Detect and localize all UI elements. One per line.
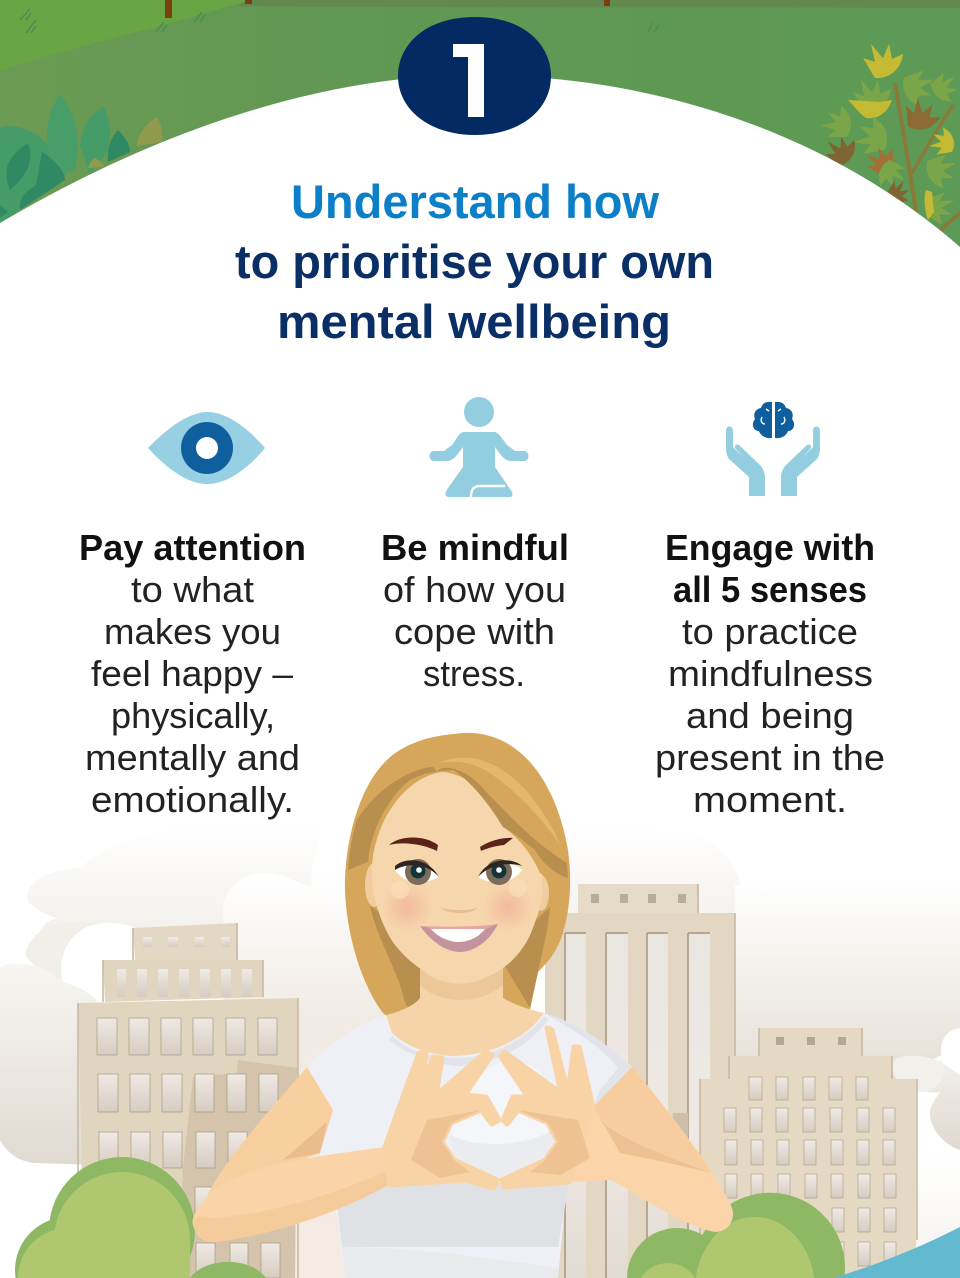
ears: [365, 863, 383, 907]
hair dark band left: [348, 767, 437, 870]
column: engage with all 5 senses: moment.: [693, 779, 847, 820]
column: engage with all 5 senses: present in the: [655, 737, 885, 778]
column: pay attention: to what: [131, 569, 254, 610]
autumn tree top-right: [817, 44, 960, 230]
column: be mindful: of how you: [383, 569, 566, 610]
column: pay attention: makes you: [104, 611, 281, 652]
title: Understand how: [291, 175, 659, 228]
smile: [420, 924, 498, 952]
icon: meditating person: [430, 397, 528, 497]
left eye: [395, 863, 439, 882]
woman making a heart with her hands: [193, 733, 733, 1278]
right eye: [478, 863, 522, 882]
icon: eye: [148, 412, 265, 484]
brain: [753, 402, 794, 438]
column: pay attention: physically,: [111, 695, 275, 736]
building on the left: [78, 923, 298, 1278]
cheeks: [381, 881, 433, 933]
water corner bottom right: [833, 1227, 960, 1278]
bushes top-left: [0, 95, 162, 225]
column: engage with all 5 senses: all 5 senses: [673, 569, 867, 610]
nose: [441, 907, 477, 913]
right hand: [501, 1028, 593, 1187]
clouds behind the city: [0, 825, 960, 1278]
dark under-hair left: [370, 905, 425, 1008]
left hand: [385, 1052, 499, 1188]
column: be mindful: Be mindful: [381, 527, 569, 568]
column: pay attention: emotionally.: [91, 779, 294, 820]
column: be mindful: cope with: [394, 611, 555, 652]
building on the right: [700, 1028, 917, 1278]
eyebrows: [389, 838, 438, 851]
shirt: [307, 1013, 632, 1278]
title: [235, 175, 714, 348]
icon: number badge: 1: [440, 25, 496, 137]
green bush bottom left: [15, 1157, 266, 1278]
title: to prioritise your own: [235, 235, 714, 288]
column: engage with all 5 senses: and being: [686, 695, 854, 736]
back hair: [345, 733, 570, 1045]
icon: hands holding brain: [726, 402, 820, 496]
right hand: [781, 426, 820, 496]
left hand: [726, 426, 765, 496]
column: pay attention: mentally and: [85, 737, 300, 778]
column: engage with all 5 senses: to practice: [682, 611, 858, 652]
title: mental wellbeing: [277, 295, 671, 348]
bangs: [437, 752, 568, 900]
dark under-hair right: [503, 907, 550, 1008]
tall building right of centre: [545, 884, 735, 1278]
column: engage with all 5 senses: Engage with: [665, 527, 875, 568]
neck and chest: [386, 960, 544, 1056]
green park header background: [0, 0, 960, 300]
column: pay attention: Pay attention: [79, 527, 306, 568]
column: pay attention: feel happy –: [91, 653, 293, 694]
column: engage with all 5 senses: [655, 527, 885, 820]
column: pay attention: [79, 527, 306, 820]
right arm: [569, 1067, 733, 1232]
icon: number badge: [398, 17, 551, 137]
column: be mindful: [381, 527, 569, 694]
face: [372, 772, 542, 982]
left upper arm: [207, 1067, 333, 1197]
column: engage with all 5 senses: mindfulness: [668, 653, 873, 694]
column: be mindful: stress.: [423, 653, 525, 694]
collar shading: [389, 1016, 549, 1066]
green bush bottom right: [627, 1193, 845, 1278]
left forearm: [193, 1147, 392, 1242]
